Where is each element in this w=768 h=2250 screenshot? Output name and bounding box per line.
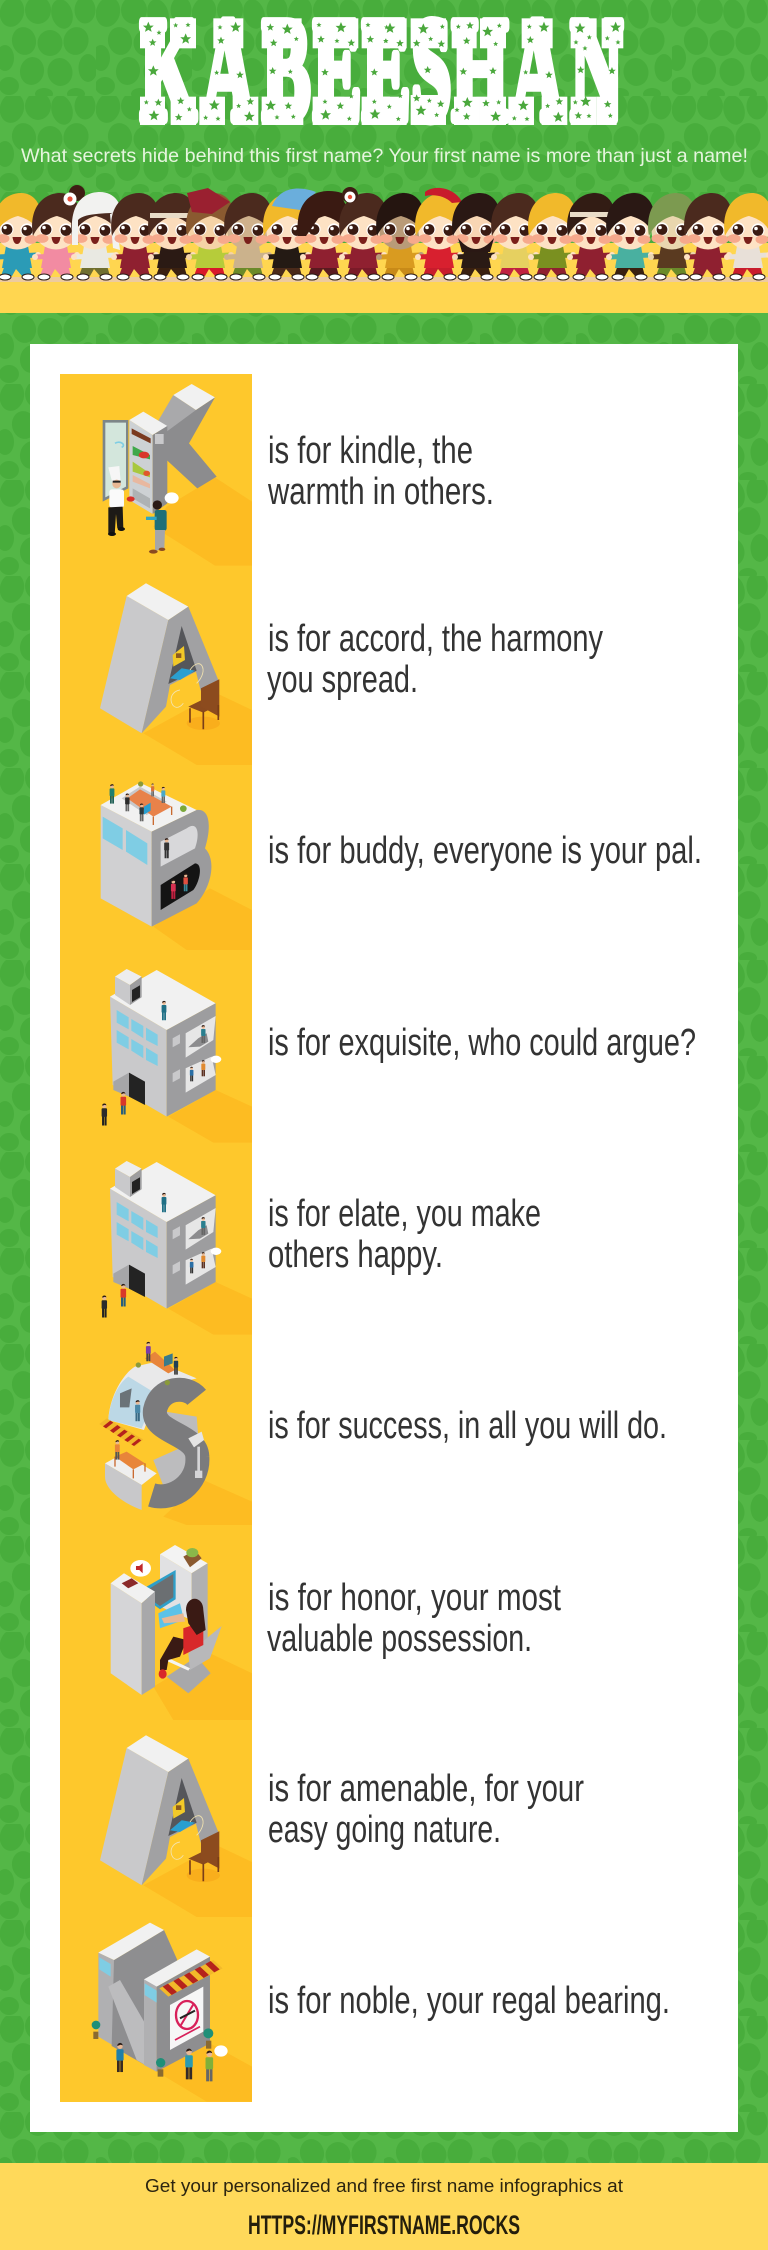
subtitle: What secrets hide behind this first name? Your first name is more than just a name!: [21, 145, 748, 167]
icon: letter H with woman at desk: [111, 1545, 252, 1720]
icon: letter E building: [102, 969, 252, 1143]
text block: A: [267, 618, 603, 701]
text block: K: is for kindle, the: [268, 430, 473, 472]
text block: A: is for accord, the harmony: [268, 618, 603, 660]
text block: A amenable: easy going nature.: [268, 1809, 501, 1851]
panel: white card: [30, 344, 738, 2132]
panel: yellow illustration column: [60, 374, 252, 2102]
text block: H: valuable possession.: [267, 1618, 532, 1660]
text block: E elate: others happy.: [268, 1234, 443, 1276]
icon: letter A with chair repeated: [100, 1735, 252, 1917]
text block: H: is for honor, your most: [268, 1577, 561, 1619]
icon: letter K with fridge, chef and customer: [103, 384, 252, 566]
footer url: HTTPS://MYFIRSTNAME.ROCKS: [248, 2210, 520, 2240]
footer text: Get your personalized and free first name infographics at: [145, 2176, 623, 2196]
text block: E elate: is for elate, you make: [268, 1193, 541, 1235]
icon: letter A with chair: [100, 583, 252, 765]
icon: letter S offices: [99, 1342, 252, 1525]
text block: E elate: [268, 1193, 541, 1276]
footer band: [0, 2163, 768, 2250]
text block: H: [267, 1577, 561, 1660]
text block: K: warmth in others.: [267, 471, 494, 513]
text block: A amenable: is for amenable, for your: [268, 1768, 584, 1810]
banner: row of costumed children: [0, 185, 768, 313]
text block: A: you spread.: [267, 659, 418, 701]
text block: A amenable: [268, 1768, 584, 1851]
text block: K: [267, 430, 494, 513]
icon: letter E building repeated: [102, 1161, 252, 1335]
icon: letter N storefront with no smoking sign: [92, 1923, 252, 2102]
icon: letter B office with roof meeting: [101, 781, 252, 950]
